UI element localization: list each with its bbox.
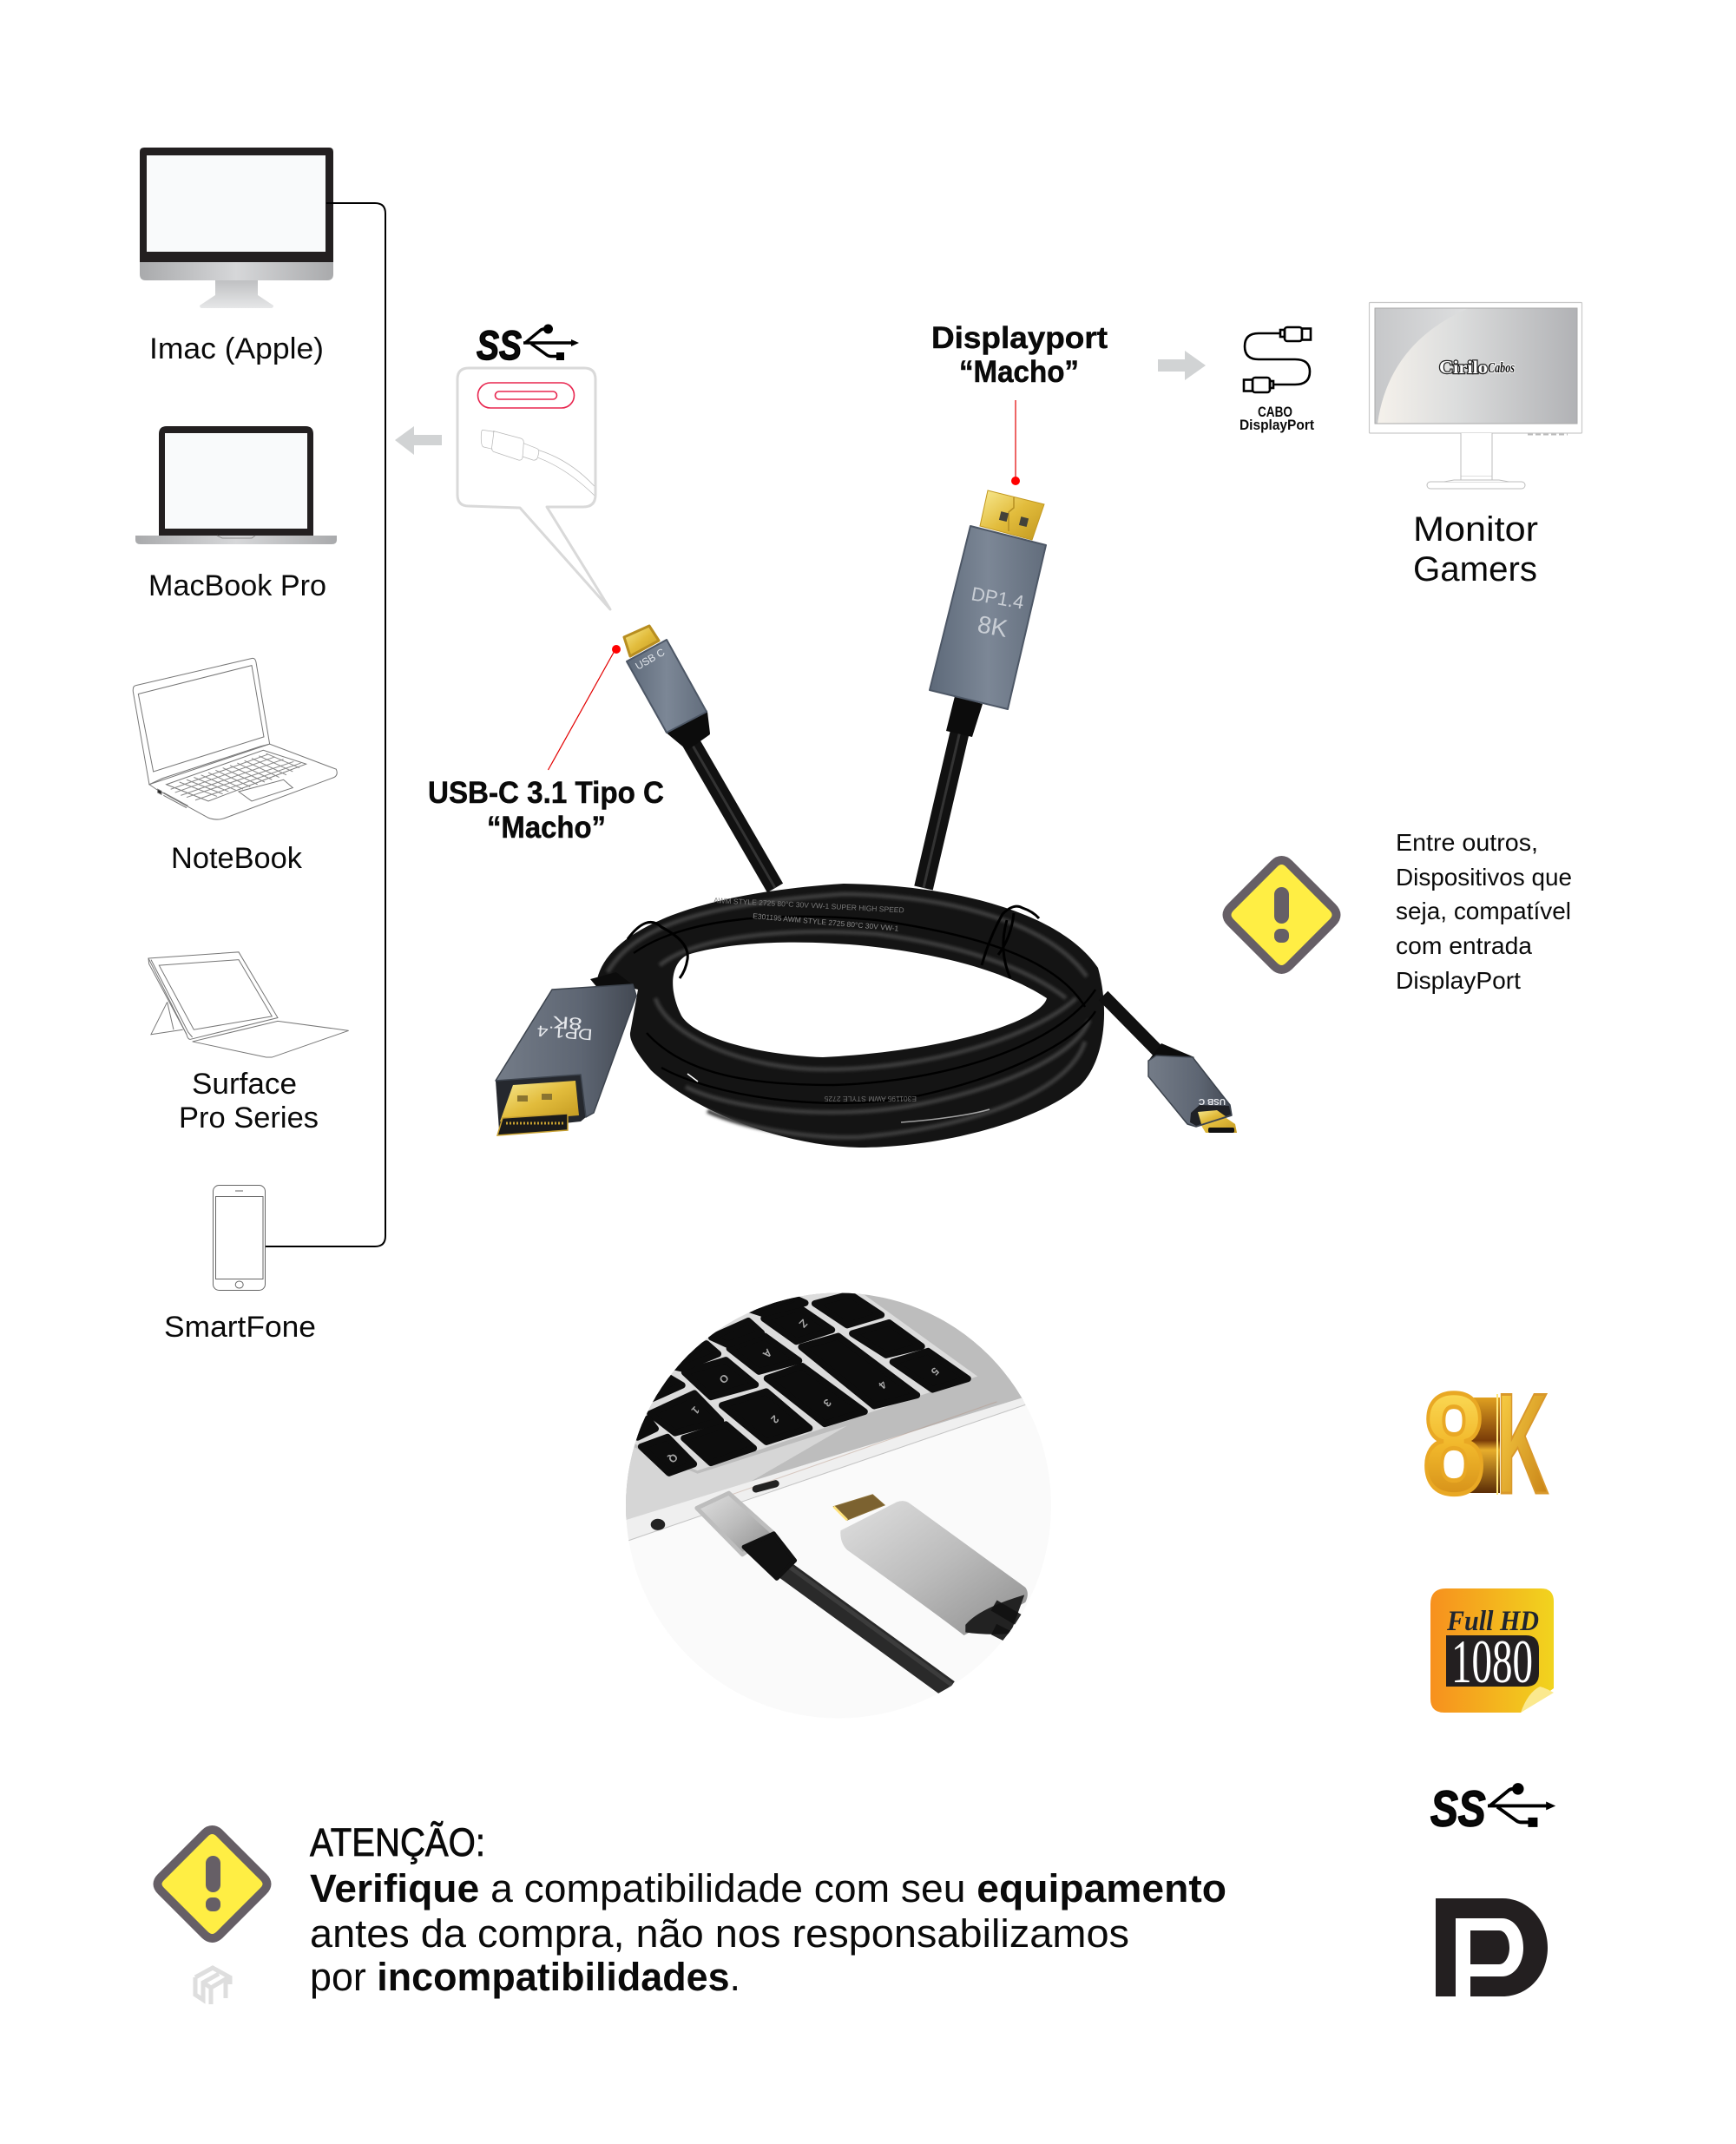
badge: Full HD 1080: Full HD <box>1446 1606 1539 1637</box>
warning text block: por incompatibilidades. <box>310 1955 740 1999</box>
label: Monitor Gamers <box>1413 510 1538 589</box>
device: gamer monitor <box>1370 302 1581 489</box>
key legends: Q <box>666 1450 681 1465</box>
coil soft highlights <box>608 894 1089 1137</box>
device: smartphone line art <box>214 1186 266 1290</box>
text: compatible devices note <box>1396 829 1572 994</box>
mini USB-C cable drawing <box>481 430 595 496</box>
label: USB-C 3.1 Tipo C Macho: USB-C 3.1 Tipo C <box>428 776 664 810</box>
key legends: O <box>716 1371 731 1386</box>
label: Monitor Gamers: Monitor <box>1413 510 1538 549</box>
logo: Cirilo Cabos: Cabos <box>1488 359 1515 376</box>
logo: Cirilo Cabos: Cirilo <box>1439 357 1488 378</box>
key legends: 5 <box>929 1365 942 1378</box>
USB-C upper connector: USB C <box>634 646 667 673</box>
coil gaps <box>687 1074 990 1122</box>
key legends: A <box>760 1346 774 1360</box>
cable printing: E301195 AWM STYLE 2725 <box>824 1095 917 1103</box>
device: iMac <box>140 148 333 308</box>
plugged USB-C connector <box>785 1569 949 1689</box>
device: Surface line art <box>148 952 349 1057</box>
label: Surface Pro Series: Pro Series <box>179 1102 319 1134</box>
ports <box>651 1519 665 1530</box>
text: compatible devices note: Entre outros, <box>1396 829 1538 856</box>
key legends: 2 <box>768 1413 781 1425</box>
icon: DisplayPort cable <box>1244 327 1311 392</box>
warning text block: antes da compra, não nos responsabilizamos <box>310 1911 1129 1956</box>
arrow: left grey <box>395 426 442 455</box>
cable printing <box>713 896 917 1103</box>
cable printing: E301195 AWM STYLE 2725 80°C 30V VW-1 <box>753 911 899 933</box>
label: Displayport Macho: Displayport <box>931 321 1108 355</box>
label: CABO DisplayPort: CABO <box>1258 404 1292 420</box>
label: Surface Pro Series <box>179 1068 319 1134</box>
DisplayPort connector (lower) <box>496 972 636 1135</box>
label: NoteBook: NoteBook <box>171 842 303 875</box>
laptop body <box>626 1293 1023 1520</box>
icon: DisplayPort logo <box>1436 1898 1548 1996</box>
device: MacBook Pro <box>135 426 337 544</box>
text: compatible devices note: DisplayPort <box>1396 967 1521 994</box>
label: Displayport Macho <box>931 321 1108 389</box>
monitor stand <box>1427 433 1525 489</box>
warning icon: bottom <box>158 1830 267 1938</box>
cable coil photo <box>597 884 1159 1148</box>
arrow: right grey <box>1158 351 1206 380</box>
coil silhouette <box>597 884 1104 1148</box>
keys <box>636 1294 968 1473</box>
keyboard well <box>626 1291 977 1470</box>
label: USB-C 3.1 Tipo C Macho: “Macho” <box>487 811 606 845</box>
warning icon: right <box>1227 860 1337 970</box>
label: CABO DisplayPort: DisplayPort <box>1240 418 1314 433</box>
text: compatible devices note: seja, compatível <box>1396 898 1571 924</box>
port outline <box>477 383 575 408</box>
key legends <box>666 1317 942 1465</box>
connector line: devices bracket <box>266 203 385 1246</box>
icon: USB SuperSpeed logo (bottom): SS <box>1430 1782 1486 1838</box>
device: notebook line art <box>133 658 337 819</box>
badge: 8K: K <box>1496 1364 1549 1523</box>
label: Displayport Macho: “Macho” <box>959 355 1079 389</box>
USB-C connector (lower): USB C <box>1199 1096 1226 1106</box>
zip ties <box>628 906 1039 978</box>
label: Monitor Gamers: Gamers <box>1413 550 1537 589</box>
DisplayPort connector (lower): DP1.4 <box>536 1023 593 1043</box>
key legends: 1 <box>689 1404 702 1417</box>
label: CABO DisplayPort <box>1240 404 1314 433</box>
USB-C connector (lower) <box>1148 1043 1237 1133</box>
label: SmartFone: SmartFone <box>164 1311 316 1344</box>
key legends: 4 <box>876 1378 889 1391</box>
cable tail to USB-C <box>1103 996 1159 1052</box>
callout: USB-C port close-up <box>457 368 610 609</box>
USB-C upper connector <box>624 626 775 888</box>
coil band separators <box>634 917 1095 1103</box>
DisplayPort connector (lower): 8K <box>551 1012 582 1033</box>
label: Imac (Apple): Imac (Apple) <box>149 332 324 365</box>
warning text block: Verifique a compatibilidade com seu equipamento <box>310 1866 1226 1911</box>
DisplayPort upper connector: DP1.4 <box>970 582 1026 614</box>
badge: Full HD 1080 <box>1430 1588 1554 1713</box>
watermark logo <box>195 1968 230 2004</box>
icon: USB SuperSpeed logo (top): SS <box>477 322 522 368</box>
monitor screen <box>1375 308 1577 424</box>
text: compatible devices note: Dispositivos que <box>1396 864 1572 891</box>
DisplayPort upper connector: 8K <box>976 610 1009 642</box>
cable printing: AWM STYLE 2725 80°C 30V VW-1 SUPER HIGH SPEED <box>713 896 904 914</box>
label: MacBook Pro: MacBook Pro <box>148 569 326 602</box>
icon: USB SuperSpeed logo (bottom) <box>1430 1782 1555 1838</box>
warning text block: ATENÇÃO: <box>310 1820 485 1864</box>
pointer: USB-C red line and dot <box>549 645 621 770</box>
text: compatible devices note: com entrada <box>1396 932 1532 959</box>
badge: Full HD 1080: 1080 <box>1451 1628 1533 1696</box>
label: USB-C 3.1 Tipo C Macho <box>428 776 664 845</box>
pointer: DisplayPort red line and dot <box>1011 400 1020 485</box>
label: Surface Pro Series: Surface <box>192 1068 297 1101</box>
logo: Cirilo Cabos <box>1439 357 1515 378</box>
key legends: 3 <box>820 1397 833 1409</box>
badge: 8K: 8 <box>1423 1364 1485 1523</box>
icon: USB SuperSpeed logo (top) <box>477 322 579 368</box>
photo: cable plugged in laptop <box>626 1293 1028 1693</box>
loose USB-C connector <box>833 1495 884 1520</box>
DisplayPort upper connector <box>924 490 1046 888</box>
key legends: Z <box>796 1317 810 1331</box>
badge: 8K <box>1423 1364 1549 1523</box>
warning text block <box>310 1820 1226 1999</box>
